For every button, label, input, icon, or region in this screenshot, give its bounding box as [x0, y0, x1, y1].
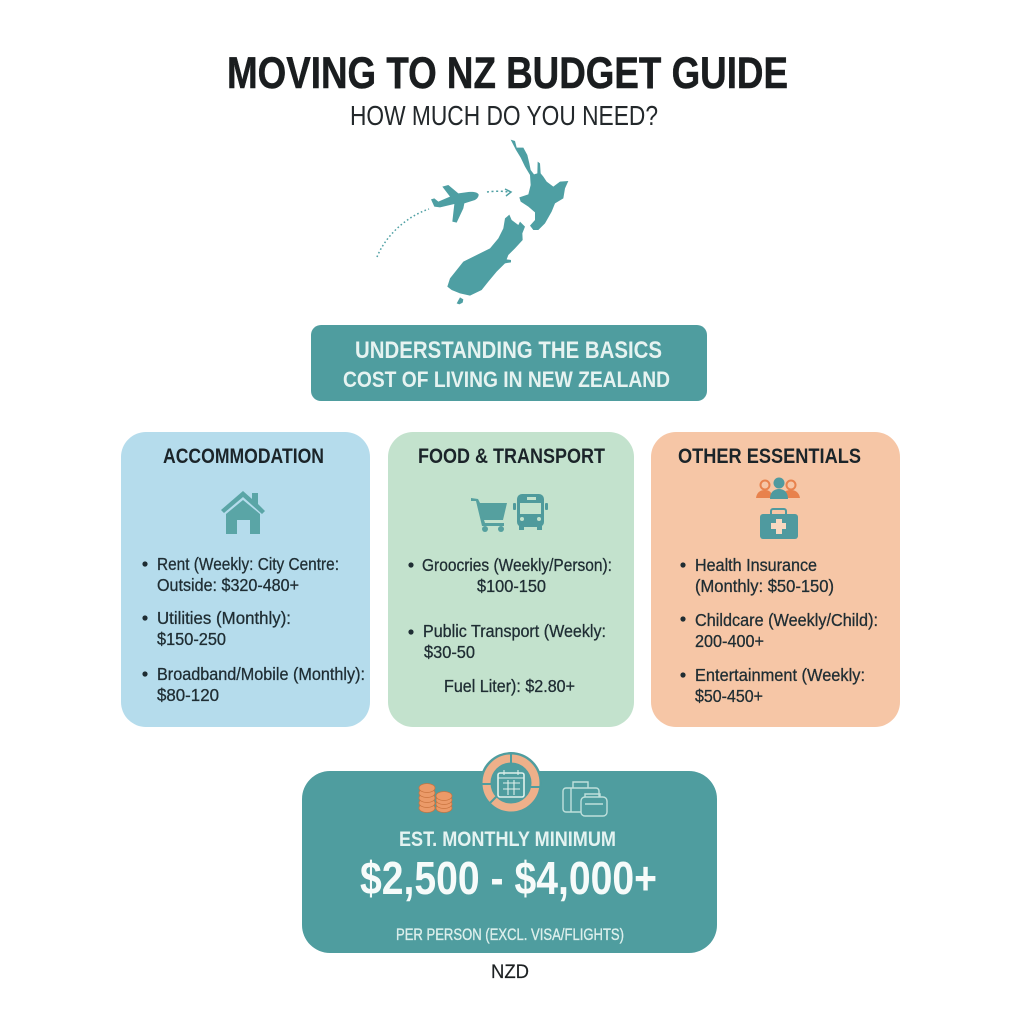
banner: COST OF LIVING IN NEW ZEALAND [343, 367, 670, 392]
list: other essentials [680, 555, 878, 706]
list: accommodation: Outside: $320-480+ [157, 575, 299, 595]
list: accommodation [142, 554, 365, 705]
icon: medical kit [760, 509, 798, 539]
list: accommodation: Rent (Weekly: City Centre: [157, 554, 339, 574]
list: food and transport [408, 555, 612, 696]
list: accommodation: Broadband/Mobile (Monthly): [157, 664, 365, 684]
subtitle: HOW MUCH DO YOU NEED? [350, 100, 658, 131]
icon: luggage [563, 782, 607, 816]
banner: UNDERSTANDING THE BASICS [355, 337, 662, 364]
icon: coins [419, 784, 452, 812]
plane [431, 185, 479, 223]
arrow head [505, 189, 511, 196]
list: food and transport: $30-50 [424, 642, 475, 662]
icon: family [756, 478, 800, 499]
title: MOVING TO NZ BUDGET GUIDE [227, 49, 788, 98]
note: PER PERSON (EXCL. VISA/FLIGHTS) [396, 926, 624, 944]
icon: house [221, 491, 265, 534]
dotted flight path left [377, 209, 429, 257]
list: other essentials: Childcare (Weekly/Child): [695, 610, 878, 630]
panel: accommodation [121, 432, 370, 727]
illustration: plane flying to New Zealand map [377, 140, 568, 304]
list: accommodation: $80-120 [157, 685, 219, 705]
banner [311, 325, 707, 401]
panel: monthly minimum [302, 752, 717, 953]
heading: other essentials: OTHER ESSENTIALS [678, 445, 861, 468]
list: accommodation: $150-250 [157, 629, 226, 649]
heading: accommodation: ACCOMMODATION [163, 445, 324, 468]
dotted flight path right [487, 190, 509, 193]
south island [447, 215, 525, 296]
panel: other essentials [651, 432, 900, 727]
icon: bus [513, 494, 548, 530]
list: food and transport: Public Transport (Weekly: [423, 621, 606, 641]
list: other essentials: (Monthly: $50-150) [695, 576, 834, 596]
list: other essentials: $50-450+ [695, 686, 763, 706]
label: estimated minimum: EST. MONTHLY MINIMUM [399, 828, 616, 851]
list: food and transport: $100-150 [477, 576, 546, 596]
heading: food and transport: FOOD & TRANSPORT [418, 445, 605, 468]
amount: $2,500 - $4,000+ [360, 852, 657, 904]
list: accommodation: Utilities (Monthly): [157, 608, 291, 628]
panel: food and transport [388, 432, 634, 727]
icon: shopping cart [471, 498, 507, 532]
list: other essentials: 200-400+ [695, 631, 764, 651]
list: other essentials: Health Insurance [695, 555, 817, 575]
north island [511, 140, 568, 230]
icon: calendar ring [480, 752, 542, 814]
list: food and transport: Fuel Liter): $2.80+ [444, 676, 575, 696]
list: other essentials: Entertainment (Weekly: [695, 665, 865, 685]
stewart island [457, 297, 463, 304]
currency label: NZD [491, 962, 529, 983]
list: food and transport: Groocries (Weekly/Person): [422, 555, 612, 575]
